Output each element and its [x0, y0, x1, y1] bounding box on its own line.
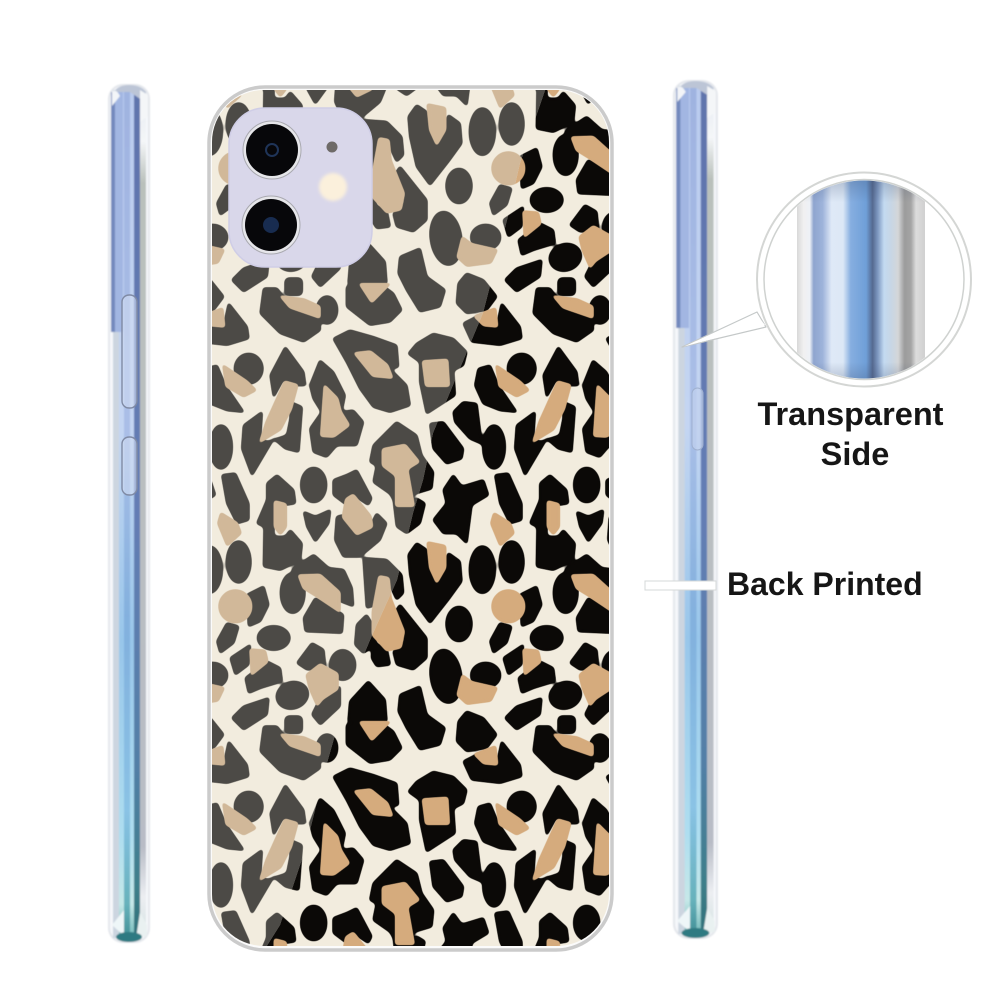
leopard print back	[212, 90, 609, 946]
magnifier callout	[682, 172, 971, 388]
side button	[692, 388, 703, 450]
wedge joint	[684, 314, 765, 346]
camera module	[229, 108, 372, 267]
label: back printed: Back Printed	[727, 566, 923, 602]
flash	[319, 173, 347, 201]
case frame	[209, 87, 612, 950]
label: transparent side	[757, 396, 944, 472]
enlarged side stripes	[797, 172, 925, 388]
bottom lens	[242, 196, 300, 254]
left side view of case	[108, 84, 150, 943]
label: transparent side: Side	[821, 436, 889, 472]
centre back view of printed case	[207, 85, 614, 952]
label: transparent side: Transparent	[757, 396, 944, 432]
pointer wedge	[682, 312, 766, 347]
side buttons	[122, 295, 137, 495]
back printed marker	[645, 581, 716, 590]
magnifier circle	[757, 172, 971, 386]
right side view of case	[673, 80, 718, 939]
top lens	[243, 121, 301, 179]
microphone	[326, 142, 338, 152]
